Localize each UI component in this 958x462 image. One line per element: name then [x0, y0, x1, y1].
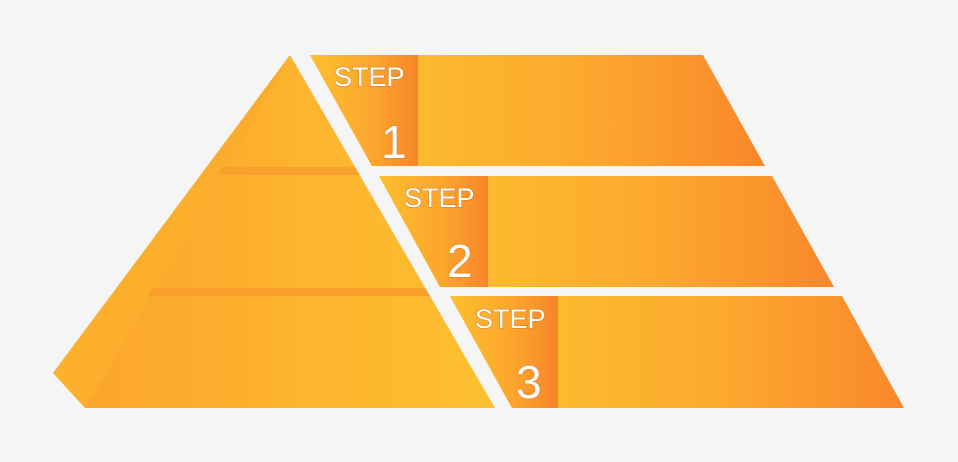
panel: step 3: STEP — [475, 304, 546, 334]
pyramid — [53, 55, 495, 408]
panel: step 3: 3 — [516, 356, 542, 408]
panel: step 1: 1 — [381, 116, 407, 168]
pyramid body — [53, 55, 495, 408]
panel: step 2 — [379, 176, 834, 287]
panel: step 1: STEP — [334, 62, 405, 92]
panel: step 3 — [450, 296, 904, 408]
pyramid left face — [53, 55, 290, 408]
panel: step 2: 2 — [447, 235, 473, 287]
band divider 1 — [217, 167, 360, 175]
panel: step 2: STEP — [404, 183, 475, 213]
step 2 label box — [379, 176, 488, 287]
panel: step 1 — [310, 55, 765, 168]
step 3 label box — [450, 296, 558, 408]
step 1 label box — [310, 55, 418, 166]
band divider 2 — [147, 288, 430, 296]
